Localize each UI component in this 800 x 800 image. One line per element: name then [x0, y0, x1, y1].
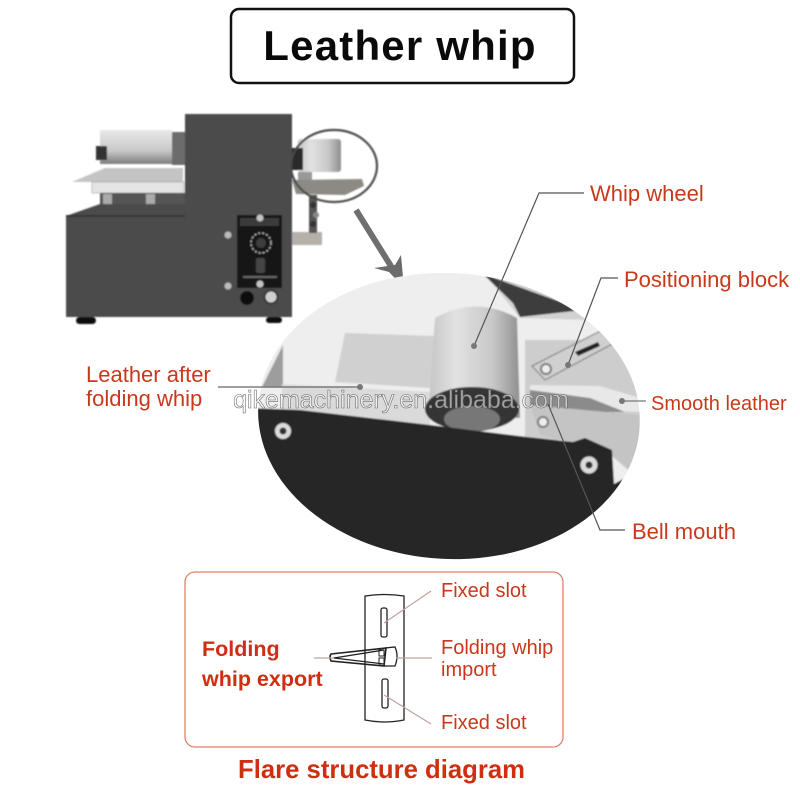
label: folding whip import: import [441, 659, 497, 681]
label: fixed slot bottom: Fixed slot [441, 712, 527, 734]
label: leather after folding whip: Leather after [86, 362, 211, 387]
flare plate [330, 594, 404, 722]
flare leaders [314, 591, 432, 724]
title [231, 9, 574, 83]
label: leather after folding whip: folding whip [86, 386, 202, 411]
leader dots [357, 343, 625, 404]
arrow [356, 210, 404, 288]
dark housing [258, 407, 624, 560]
label: folding whip export: Folding [202, 637, 280, 661]
callout ring [291, 130, 377, 202]
label: fixed slot top: Fixed slot [441, 580, 527, 602]
panel: flare structure [185, 572, 563, 747]
label: smooth leather: Smooth leather [651, 393, 787, 415]
label: folding whip export: whip export [201, 667, 323, 691]
motor bracket and spring [292, 172, 364, 245]
positioning block [532, 327, 616, 380]
leader: positioning block [568, 278, 618, 365]
label: positioning block: Positioning block [624, 267, 790, 292]
leader: leather after folding whip [218, 386, 360, 388]
machine photo [66, 114, 377, 324]
whip wheel small [298, 139, 341, 172]
leader: smooth leather [622, 400, 646, 402]
control panel [237, 214, 282, 288]
label: bell mouth: Bell mouth [632, 519, 736, 544]
machine body [66, 114, 292, 317]
screws [275, 423, 291, 439]
leader: whip wheel [474, 193, 584, 346]
title: Leather whip [263, 22, 537, 69]
feed plate and rollers [72, 130, 186, 214]
leader: bell mouth [548, 404, 625, 530]
label: whip wheel: Whip wheel [590, 181, 704, 206]
detail photo [250, 270, 650, 570]
whip wheel [428, 306, 520, 418]
caption: Flare structure diagram [238, 756, 525, 784]
machine feet [76, 317, 96, 324]
watermark: qikemachinery.en.alibaba.com [233, 386, 569, 414]
label: folding whip import: Folding whip [441, 637, 553, 659]
